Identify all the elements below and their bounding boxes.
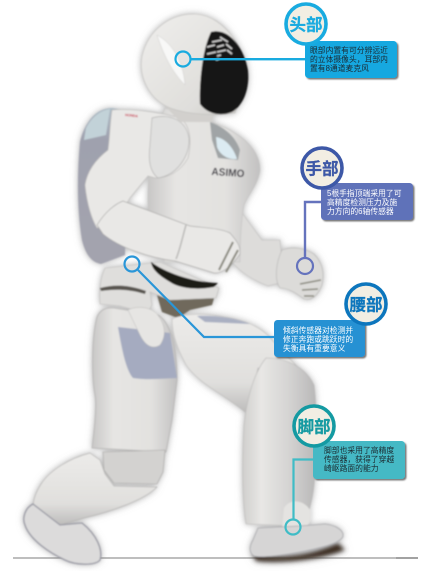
front foot: [250, 524, 343, 557]
callout: foot: [286, 406, 405, 534]
neck: [165, 106, 215, 122]
ankle: [282, 501, 311, 530]
connector: waist: [124, 256, 276, 337]
text box: waist: 失衡具有重要意义: [283, 343, 346, 353]
torso: [148, 108, 260, 262]
callout: waist: [124, 256, 386, 357]
rear thigh gray patch: [118, 327, 177, 379]
text box: waist: 修正奔跑或跳跃时的: [283, 334, 353, 344]
rear shin: [33, 453, 157, 525]
far arm: [232, 210, 284, 286]
text box: head: 的立体摄像头，耳部内: [310, 54, 388, 64]
front lower leg: [243, 358, 317, 526]
head ear highlight: [157, 35, 185, 85]
text box: waist: 倾斜传感器对检测并: [283, 325, 353, 335]
front foot shadow: [252, 543, 345, 562]
dark waist band: [151, 262, 218, 289]
text box: foot: 传感器，获得了穿越: [324, 454, 394, 464]
text box: hand: [321, 183, 413, 220]
backpack: [78, 108, 125, 264]
visor reflections: [207, 37, 232, 60]
badge: waist: 腰部: [350, 294, 382, 314]
pelvis: [100, 262, 219, 312]
fist ridges: [219, 242, 238, 272]
badge: head: [286, 4, 326, 44]
connector: foot: [286, 460, 315, 534]
chest plate: [210, 122, 240, 160]
text box: head: [305, 41, 397, 78]
connector: hand: [297, 202, 322, 274]
text box: foot: [313, 441, 405, 479]
upper arm: [85, 109, 190, 228]
badge: foot: 脚部: [298, 416, 330, 436]
shoulder cap: [149, 116, 189, 178]
text box: waist: [274, 320, 365, 357]
forearm: [97, 201, 240, 273]
logo: ASIMO: ASIMO: [211, 166, 245, 180]
ground line: [13, 558, 418, 559]
front thigh: [172, 314, 310, 412]
badge: head: 头部: [290, 14, 322, 34]
head: [141, 14, 248, 115]
text box: head: 置有8通道麦克风: [310, 63, 369, 73]
rear thigh: [92, 308, 177, 452]
hip knob: [128, 307, 164, 347]
rear foot: [24, 504, 101, 564]
shoulder text: HONDA: [125, 113, 139, 118]
visor: [200, 31, 248, 114]
callout: head: [176, 4, 397, 78]
text box: foot: 崎岖路面的能力: [324, 463, 379, 473]
robot illustration: [24, 14, 345, 564]
text box: hand: 高精度检测压力及施: [327, 197, 397, 207]
text box: head: 眼部内置有可分辨远近: [310, 45, 388, 55]
text box: hand: 力方向的6轴传感器: [327, 206, 394, 216]
hip joint dark: [155, 288, 217, 318]
front fist: [276, 248, 323, 299]
badge: hand: 手部: [306, 158, 338, 178]
callout: hand: [297, 148, 413, 274]
badge: waist: [346, 284, 386, 324]
text box: hand: 5根手指顶端采用了可: [327, 188, 402, 198]
rear knee: [103, 450, 165, 484]
connector: head: [176, 52, 306, 66]
text box: foot: 脚部也采用了高精度: [324, 445, 394, 455]
